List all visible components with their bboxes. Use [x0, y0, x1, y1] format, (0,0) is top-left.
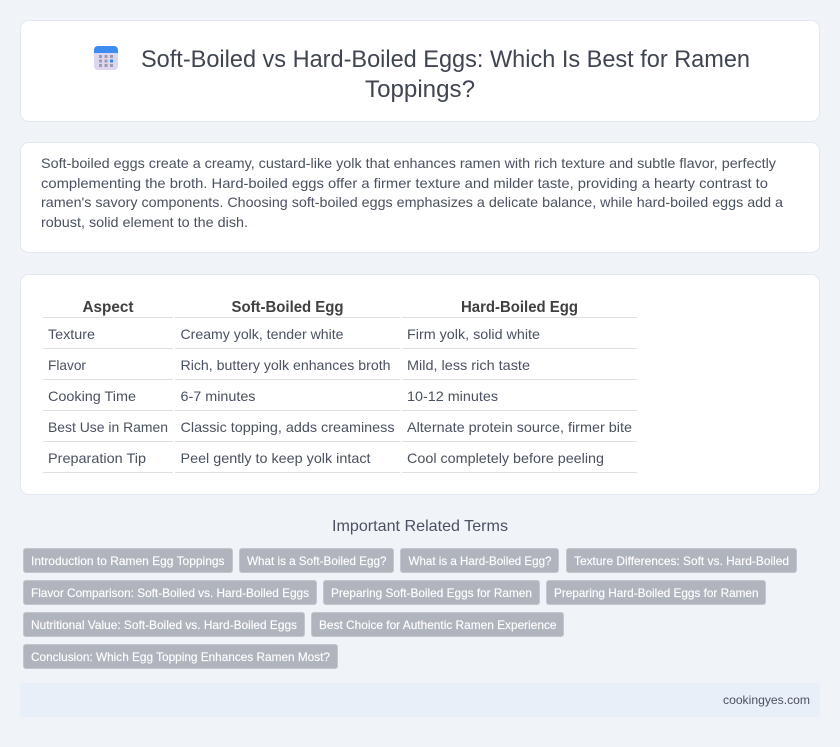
row: preparation tip [48, 450, 604, 466]
tag: Preparing Hard-Boiled Eggs for Ramen [554, 586, 758, 600]
icon: calendar [94, 46, 118, 70]
panel: introduction text: robust, solid element to the dish. [41, 214, 248, 230]
tag: What is a Hard-Boiled Egg? [408, 554, 552, 568]
row: cooking time: 10-12 minutes [407, 388, 498, 404]
panel: introduction text: ramen's savory components. Choosing soft-boiled eggs emphasizes a delicate balance, while hard-boiled eggs add a [41, 194, 783, 210]
panel: introduction text: Soft-boiled eggs create a creamy, custard-like yolk that enhances ramen with rich texture and subtle flavor, perfectly [41, 155, 776, 171]
tag [324, 580, 540, 604]
tag [546, 580, 766, 604]
tag: What is a Soft-Boiled Egg? [247, 554, 387, 568]
tag: Preparing Soft-Boiled Eggs for Ramen [331, 586, 532, 600]
tag: Conclusion: Which Egg Topping Enhances Ramen Most? [31, 650, 330, 664]
row: flavor: Rich, buttery yolk enhances broth [180, 357, 390, 373]
table header row: Hard-Boiled Egg [461, 299, 578, 316]
title: Soft-Boiled vs Hard-Boiled Eggs: Which Is Best for Ramen [141, 46, 750, 73]
row: best use in ramen: Classic topping, adds creaminess [180, 419, 394, 435]
panel: header [20, 20, 820, 122]
row: texture: Firm yolk, solid white [407, 326, 540, 342]
row: flavor: Mild, less rich taste [407, 357, 530, 373]
table header row: Aspect [82, 299, 134, 316]
tag [24, 612, 304, 636]
tag [240, 548, 394, 572]
row: preparation tip: Cool completely before peeling [407, 450, 604, 466]
row: preparation tip: Preparation Tip [48, 450, 146, 466]
tag: Best Choice for Authentic Ramen Experience [319, 618, 557, 632]
tag [566, 548, 796, 572]
row: texture: Creamy yolk, tender white [180, 326, 344, 342]
tag: Nutritional Value: Soft-Boiled vs. Hard-Boiled Eggs [31, 618, 297, 632]
row: texture [48, 326, 540, 342]
footer [20, 683, 820, 717]
title [141, 46, 750, 103]
tag: Flavor Comparison: Soft-Boiled vs. Hard-Boiled Eggs [31, 586, 309, 600]
row: best use in ramen: Best Use in Ramen [48, 419, 168, 435]
tag [312, 612, 564, 636]
tag: Texture Differences: Soft vs. Hard-Boiled [574, 554, 789, 568]
tag [400, 548, 558, 572]
tag [24, 644, 338, 668]
title: Toppings? [365, 76, 475, 103]
row: preparation tip: Peel gently to keep yolk intact [180, 450, 371, 466]
tag: Introduction to Ramen Egg Toppings [31, 554, 224, 568]
row: flavor: Flavor [48, 357, 86, 373]
panel: comparison table [20, 274, 820, 494]
row: cooking time: 6-7 minutes [180, 388, 256, 404]
table header row [82, 299, 578, 316]
panel: introduction text [20, 142, 820, 252]
tag [24, 580, 316, 604]
row: texture: Texture [48, 326, 95, 342]
row: cooking time [48, 388, 498, 404]
footer: cookingyes.com [723, 693, 810, 707]
heading: important related terms: Important Related Terms [332, 518, 508, 535]
row: flavor [48, 357, 530, 373]
tag [24, 548, 232, 572]
row: best use in ramen: Alternate protein source, firmer bite [407, 419, 632, 435]
table header row: Soft-Boiled Egg [232, 299, 344, 316]
tag list [24, 548, 796, 668]
panel: introduction text: complementing the broth. Hard-boiled eggs offer a firmer texture and milder taste, providing a hearty contrast to [41, 175, 768, 191]
row: cooking time: Cooking Time [48, 388, 136, 404]
row: best use in ramen [48, 419, 632, 435]
